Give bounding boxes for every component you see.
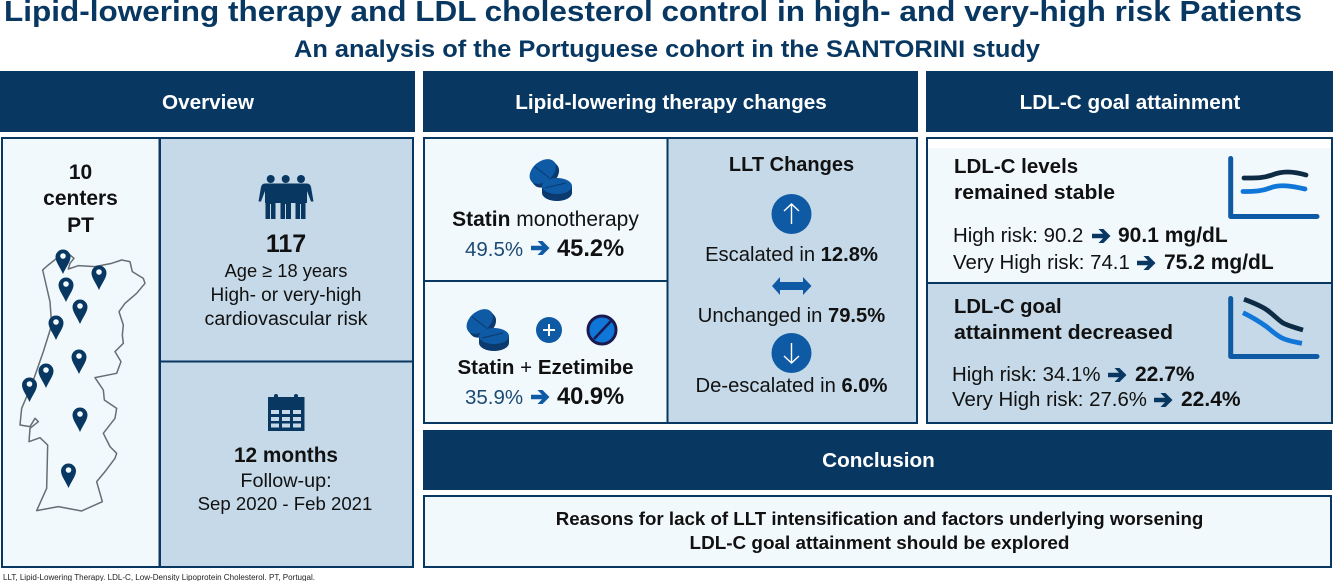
LDL-C levels values: 90.1 mg/dL [1118, 224, 1228, 247]
goal attainment values: Very High risk: 27.6% [952, 389, 1147, 411]
goal attainment heading: LDL-C goal [954, 296, 1062, 318]
centers label: PT [67, 214, 94, 237]
header: Lipid-lowering therapy changes [423, 71, 918, 132]
chart icon: decreasing lines [1231, 298, 1317, 356]
header: LDL-C goal attainment [926, 71, 1333, 132]
icon: up arrow [772, 194, 812, 234]
header: Lipid-lowering therapy changes: Lipid-lowering therapy changes [515, 91, 827, 114]
header: Conclusion [423, 430, 1332, 490]
title: An analysis of the Portuguese cohort in the SANTORINI study [294, 36, 1041, 63]
goal attainment values: 22.4% [1181, 388, 1241, 411]
panel: centers map [2, 138, 160, 567]
panel: LLT changes [668, 138, 917, 423]
header: Overview [0, 71, 415, 132]
combination text: 35.9% [465, 386, 523, 409]
icon: pills [525, 154, 572, 201]
statin text: 45.2% [557, 236, 624, 262]
map of Portugal with pins [20, 250, 145, 511]
patients text: High- or very-high [210, 285, 362, 306]
statin text [452, 208, 639, 262]
LDL-C levels heading [954, 155, 1115, 204]
goal attainment values: 22.7% [1135, 363, 1195, 386]
follow-up text: 12 months [234, 444, 338, 467]
escalated text: Escalated in 12.8% [705, 244, 878, 266]
panel: LDL-C goal attainment [927, 283, 1332, 423]
combination text: Statin + Ezetimibe [457, 356, 634, 379]
panel: LDL-C levels [927, 138, 1332, 283]
LDL-C levels values: High risk: 90.2 [953, 225, 1083, 247]
LDL-C levels heading: remained stable [954, 181, 1115, 204]
patients text: 117 [266, 230, 306, 258]
combination text [457, 356, 634, 410]
centers label: 10 [69, 161, 92, 184]
centers label [43, 161, 118, 237]
header: LDL-C goal attainment: LDL-C goal attainment [1020, 91, 1240, 114]
de-escalated text: De-escalated in 6.0% [696, 375, 888, 397]
icon: people [258, 175, 314, 219]
panel: statin monotherapy [424, 138, 668, 281]
LDL-C levels values: Very High risk: 74.1 [953, 252, 1130, 274]
patients text [204, 230, 368, 330]
title [4, 0, 1302, 63]
goal attainment heading [954, 296, 1173, 344]
LDL-C levels heading: LDL-C levels [954, 155, 1078, 178]
follow-up text: Sep 2020 - Feb 2021 [198, 493, 372, 514]
icon: ezetimibe pill [588, 316, 616, 344]
follow-up text [198, 444, 372, 514]
goal attainment values [952, 363, 1241, 411]
icon: down arrow [772, 333, 812, 373]
panel: conclusion text: Reasons for lack of LLT intensification and factors underlying worsening [556, 508, 1203, 529]
header: Overview: Overview [162, 91, 255, 114]
icon: pills [462, 304, 509, 351]
panel: statin plus ezetimibe [424, 281, 668, 423]
statin text: Statin monotherapy [452, 208, 639, 231]
patients text: Age ≥ 18 years [225, 260, 347, 281]
follow-up text: Follow-up: [240, 470, 332, 492]
icon: double arrow [772, 277, 812, 295]
panel: conclusion text [424, 496, 1331, 567]
statin text: 49.5% [465, 238, 523, 261]
panel: follow-up [160, 362, 413, 567]
unchanged text: Unchanged in 79.5% [698, 305, 885, 327]
panel: conclusion text: LDL-C goal attainment should be explored [690, 533, 1069, 554]
LDL-C levels values: 75.2 mg/dL [1164, 251, 1274, 274]
icon: calendar [268, 394, 304, 431]
LLT changes heading: LLT Changes [729, 154, 854, 176]
panel: patients [160, 138, 413, 362]
goal attainment values: High risk: 34.1% [952, 364, 1100, 386]
header: Conclusion: Conclusion [822, 449, 935, 472]
LDL-C levels values [953, 224, 1274, 274]
chart icon: stable lines [1231, 158, 1317, 216]
icon: plus [536, 317, 562, 343]
centers label: centers [43, 187, 118, 210]
patients text: cardiovascular risk [204, 308, 368, 330]
combination text: 40.9% [557, 384, 624, 410]
goal attainment heading: attainment decreased [954, 321, 1173, 344]
